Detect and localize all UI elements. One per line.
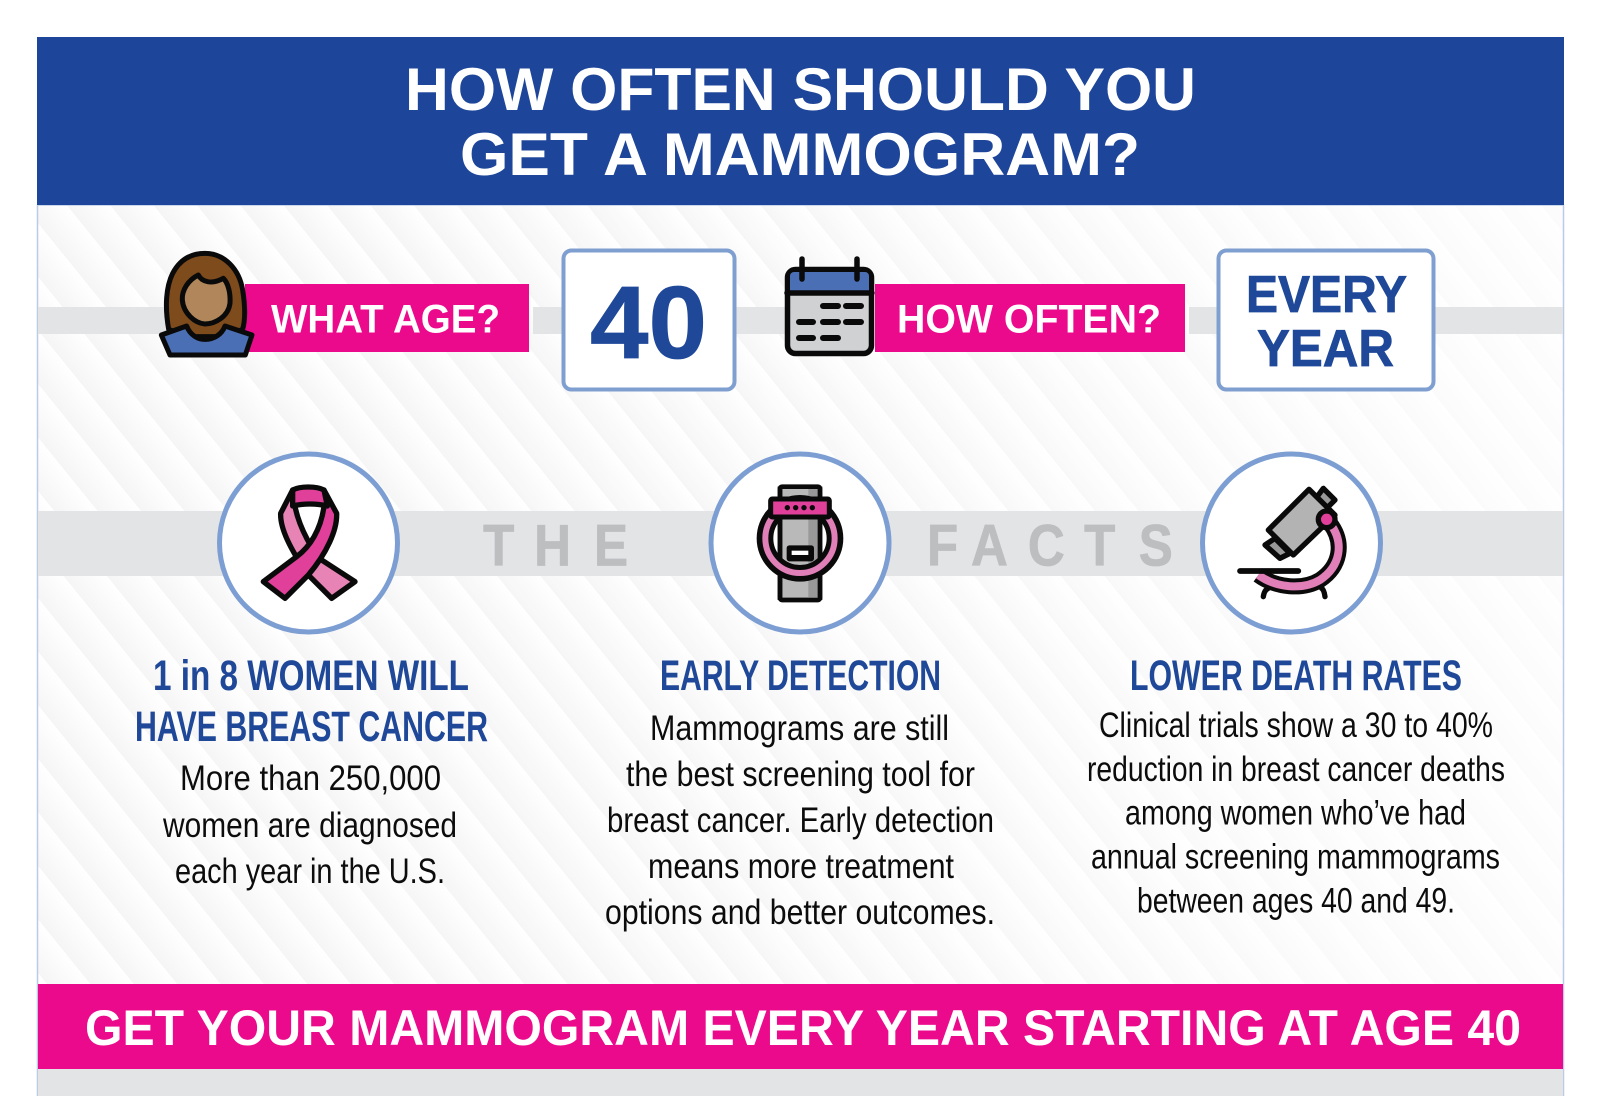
fact: lower death rates — [1087, 652, 1505, 920]
answer box: 40: 40 — [590, 265, 707, 380]
title: GET A MAMMOGRAM? — [460, 121, 1140, 188]
title — [405, 56, 1196, 188]
fact: early detection: means more treatment — [648, 847, 954, 886]
fact: lower death rates: reduction in breast cancer deaths — [1087, 750, 1505, 789]
fact: 1 in 8 women: 1 in 8 WOMEN WILL — [153, 652, 469, 700]
call to action banner: GET YOUR MAMMOGRAM EVERY YEAR STARTING AT AGE 40 — [85, 1000, 1521, 1056]
fact: early detection: the best screening tool for — [626, 755, 975, 794]
fact: 1 in 8 women: women are diagnosed — [162, 806, 457, 845]
the facts band: FACTS — [927, 513, 1173, 578]
fact: lower death rates: Clinical trials show a 30 to 40% — [1099, 706, 1493, 745]
what age label — [245, 284, 529, 352]
fact: lower death rates: among women who’ve had — [1125, 794, 1466, 832]
header banner — [37, 37, 1564, 205]
fact: early detection: EARLY DETECTION — [660, 652, 941, 700]
how often label: HOW OFTEN? — [897, 298, 1161, 342]
fact: lower death rates: LOWER DEATH RATES — [1130, 652, 1462, 700]
call to action banner — [38, 984, 1563, 1069]
fact: 1 in 8 women: each year in the U.S. — [175, 852, 445, 891]
what age label: WHAT AGE? — [271, 298, 500, 342]
the facts band: THE — [483, 513, 628, 578]
striped background panel — [38, 205, 1564, 1096]
grey band: question row — [38, 307, 1563, 334]
fact: lower death rates: between ages 40 and 49. — [1137, 882, 1455, 920]
answer box: every year — [1218, 250, 1434, 390]
fact: early detection: breast cancer. Early detection — [607, 801, 994, 840]
answer box: every year: EVERY — [1246, 266, 1407, 324]
fact: 1 in 8 women — [135, 652, 488, 891]
icon: mammogram machine — [711, 454, 889, 632]
icon: awareness ribbon — [220, 454, 398, 632]
fact: early detection: Mammograms are still — [650, 709, 949, 748]
icon: calendar — [787, 259, 872, 354]
fact: lower death rates: annual screening mammograms — [1091, 838, 1500, 876]
how often label — [875, 284, 1185, 352]
the facts band — [38, 511, 1563, 578]
fact: early detection: options and better outcomes. — [605, 893, 995, 932]
answer box: every year: YEAR — [1257, 320, 1394, 378]
answer box: 40 — [564, 250, 734, 390]
title: HOW OFTEN SHOULD YOU — [405, 56, 1196, 123]
fact: early detection — [605, 652, 995, 932]
fact: 1 in 8 women: More than 250,000 — [180, 759, 441, 798]
fact: 1 in 8 women: HAVE BREAST CANCER — [135, 703, 488, 751]
icon: woman — [161, 253, 252, 355]
footer band — [38, 1069, 1563, 1096]
icon: microscope — [1202, 454, 1380, 632]
